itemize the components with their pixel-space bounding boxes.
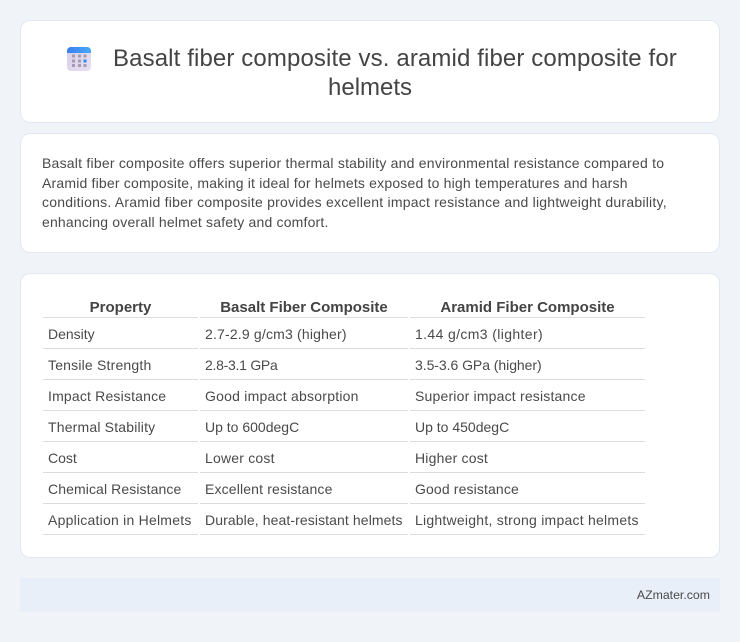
text block: summary paragraph: Basalt fiber composite offers superior thermal stability and environmental resistance compared to (42, 155, 664, 171)
text block: summary paragraph (42, 155, 667, 230)
row: Thermal Stability: Thermal Stability (48, 419, 155, 435)
row: Thermal Stability: Up to 450degC (415, 419, 509, 435)
footer text: AZmater.com: AZmater.com (637, 588, 710, 602)
row: Tensile Strength: Tensile Strength (48, 357, 151, 373)
header: Aramid Fiber Composite: Aramid Fiber Composite (440, 299, 615, 316)
row: Density: 1.44 g/cm3 (lighter) (415, 326, 543, 342)
footer bar (20, 578, 720, 612)
row: Application in Helmets: Durable, heat-resistant helmets (205, 512, 403, 528)
row: Chemical Resistance (48, 481, 519, 497)
row: Density: Density (48, 326, 95, 342)
title: Basalt fiber composite vs. aramid fiber composite for (113, 45, 677, 72)
row: Cost: Lower cost (205, 450, 275, 466)
row: Impact Resistance: Good impact absorption (205, 388, 359, 404)
row: Chemical Resistance: Chemical Resistance (48, 481, 181, 497)
text block: summary paragraph: conditions. Aramid fiber composite provides excellent impact resistance and lightweight durability, (42, 194, 667, 210)
row: Impact Resistance: Impact Resistance (48, 388, 166, 404)
row: Application in Helmets: Lightweight, strong impact helmets (415, 512, 639, 528)
row: Impact Resistance (48, 388, 586, 404)
row: Tensile Strength: 3.5-3.6 GPa (higher) (415, 357, 542, 373)
row: Cost: Higher cost (415, 450, 488, 466)
text block: summary paragraph: Aramid fiber composite, making it ideal for helmets exposed to high temperatures and harsh (42, 174, 628, 190)
row: Cost: Cost (48, 450, 77, 466)
panel: comparison table (20, 273, 720, 558)
panel: title card (20, 20, 720, 123)
text block: summary paragraph: enhancing overall helmet safety and comfort. (42, 214, 329, 230)
header: Property: Property (90, 299, 151, 316)
title (113, 45, 677, 101)
row: Tensile Strength: 2.8-3.1 GPa (205, 357, 278, 373)
row: Thermal Stability: Up to 600degC (205, 419, 299, 435)
header: Basalt Fiber Composite: Basalt Fiber Composite (220, 299, 388, 316)
row: Tensile Strength (48, 357, 542, 373)
row: Thermal Stability (48, 419, 509, 435)
row: Density (48, 326, 543, 342)
row: Application in Helmets: Application in Helmets (48, 512, 192, 528)
title: helmets (328, 74, 412, 101)
row: Chemical Resistance: Good resistance (415, 481, 519, 497)
panel: summary (20, 133, 720, 253)
row: Cost (48, 450, 488, 466)
row: Impact Resistance: Superior impact resistance (415, 388, 586, 404)
row: Chemical Resistance: Excellent resistance (205, 481, 333, 497)
row: Density: 2.7-2.9 g/cm3 (higher) (205, 326, 347, 342)
icon: calendar (67, 47, 91, 71)
row: Application in Helmets (48, 512, 639, 528)
